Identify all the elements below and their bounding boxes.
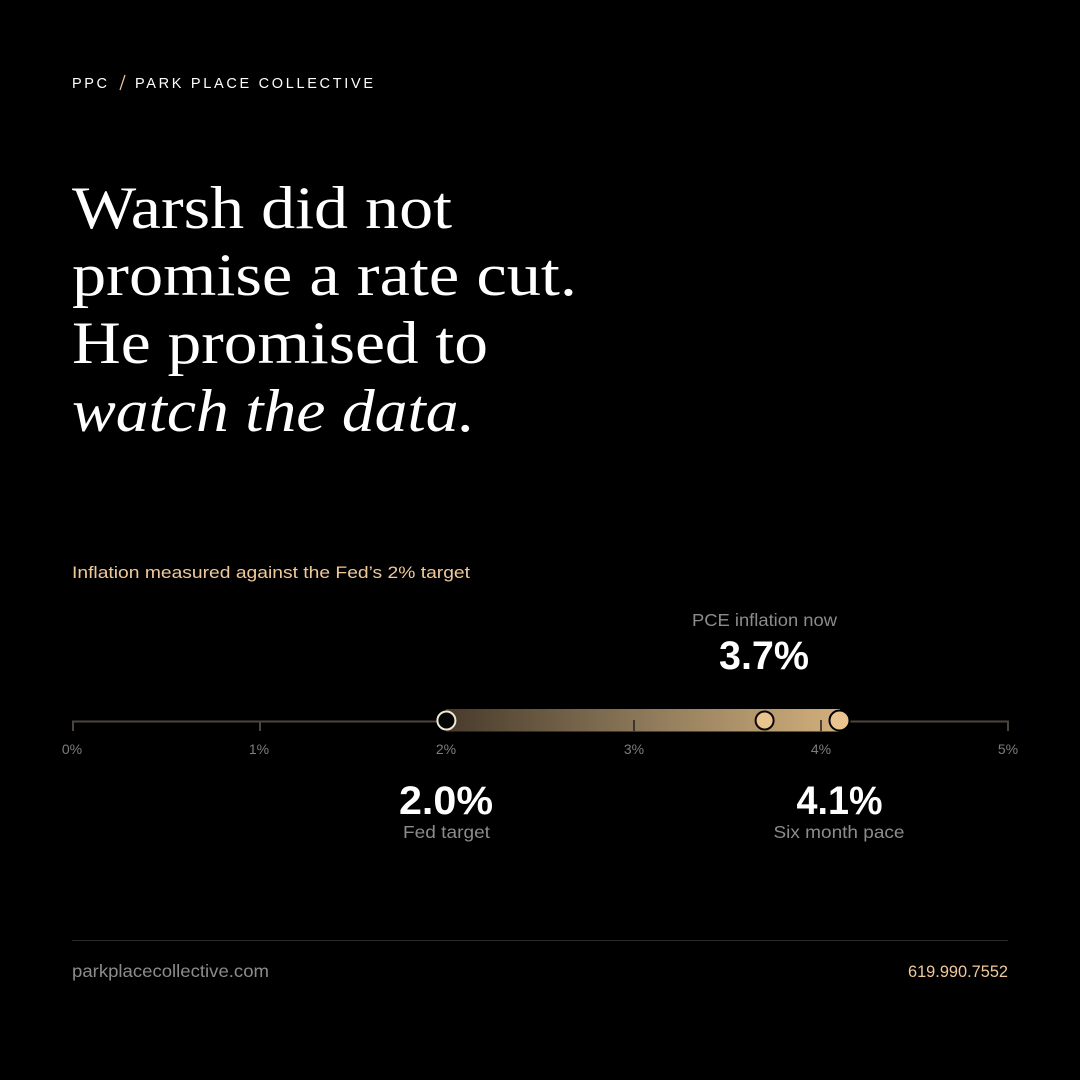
title: He promised to bbox=[72, 310, 488, 376]
axis labels: 5% bbox=[998, 741, 1018, 757]
callout: Six month pace bbox=[774, 779, 904, 842]
marker: PCE 3.7% bbox=[756, 712, 774, 730]
axis labels: 4% bbox=[811, 741, 831, 757]
title bbox=[72, 175, 577, 444]
callout: Fed target: Fed target bbox=[403, 822, 490, 842]
callout: PCE inflation now: 3.7% bbox=[719, 634, 809, 678]
marker: six month pace 4.1% bbox=[830, 710, 850, 730]
footer website: parkplacecollective.com bbox=[72, 961, 269, 981]
axis line bbox=[72, 721, 1009, 731]
chart subtitle: Inflation measured against the Fed’s 2% target bbox=[72, 563, 470, 582]
range bar bbox=[446, 709, 840, 732]
callout: Six month pace: 4.1% bbox=[796, 779, 882, 823]
inflation range chart bbox=[62, 709, 1018, 757]
title: Warsh did not bbox=[72, 175, 452, 241]
footer phone: 619.990.7552 bbox=[908, 963, 1008, 981]
title: promise a rate cut. bbox=[72, 242, 577, 308]
axis labels: 1% bbox=[249, 741, 269, 757]
brand header: PPC bbox=[72, 76, 107, 92]
axis labels: 2% bbox=[436, 741, 456, 757]
axis labels bbox=[62, 741, 1018, 757]
callout: Fed target bbox=[399, 779, 493, 842]
callout: Fed target: 2.0% bbox=[399, 779, 493, 823]
title: watch the data. bbox=[72, 378, 475, 444]
axis labels: 3% bbox=[624, 741, 644, 757]
brand header: PARK PLACE COLLECTIVE bbox=[135, 76, 373, 92]
axis labels: 0% bbox=[62, 741, 82, 757]
callout: PCE inflation now bbox=[692, 610, 837, 678]
callout: Six month pace: Six month pace bbox=[774, 822, 904, 842]
marker: Fed target 2.0% bbox=[437, 712, 455, 730]
bar ticks bbox=[634, 720, 821, 731]
callout: PCE inflation now: PCE inflation now bbox=[692, 610, 837, 630]
